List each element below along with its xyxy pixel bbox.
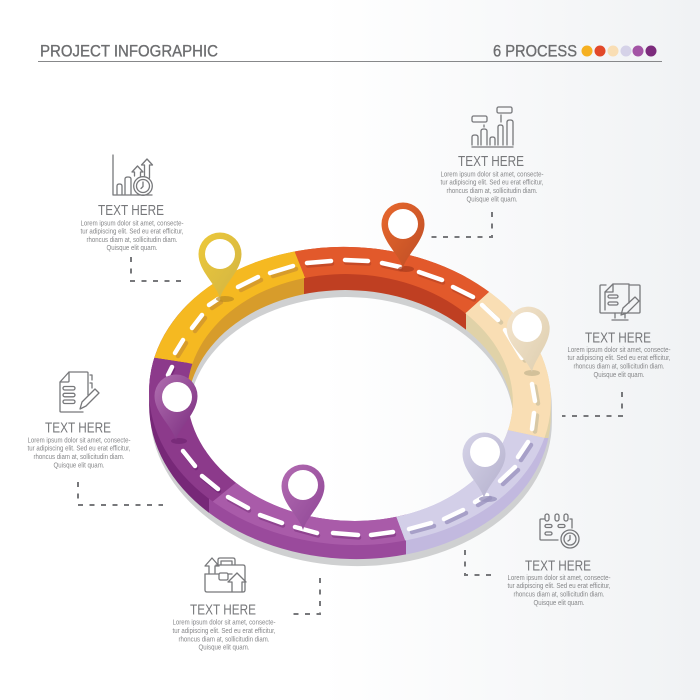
block: left text: rhoncus diam at, sollicitudin diam. [34,454,125,461]
block: right text: Lorem ipsum dolor sit amet, consecte- [568,347,671,354]
map pin: dark purple [154,374,198,444]
block: bottom text: tur adipiscing elit. Sed eu erat efficitur, [172,628,276,635]
block: lower right text: Lorem ipsum dolor sit amet, consecte- [508,575,611,582]
lane dashes: yellow [175,266,296,356]
block: left text [28,420,131,469]
block: lower right text: rhoncus diam at, sollicitudin diam. [514,592,605,598]
block: top right text: TEXT HERE [458,154,524,170]
block: top left text: rhoncus diam at, sollicitudin diam. [86,237,178,244]
block: left text: TEXT HERE [45,420,111,436]
block: lower right text [508,558,611,607]
icon: bar chart with labels [472,107,513,147]
block: left text: Lorem ipsum dolor sit amet, consecte- [28,437,131,444]
block: top right text: tur adipiscing elit. Sed eu erat efficitur, [440,180,544,187]
process colour dots [582,46,656,56]
ring side walls [149,247,551,559]
block: right text: TEXT HERE [585,330,651,346]
map pin: yellow [198,232,242,302]
lane dashes: lilac [409,442,531,532]
block: bottom text [172,602,276,652]
icon: briefcase with arrows [205,558,246,592]
block: top left text: Lorem ipsum dolor sit amet, consecte- [80,220,184,227]
road segment: light purple [213,482,405,545]
block: top right text [440,154,544,203]
lane dashes: light purple [228,497,394,538]
block: top left text: tur adipiscing elit. Sed eu erat efficitur, [80,228,184,236]
road segment: cream [465,292,551,438]
block: top left text: Quisque elit quam. [106,245,158,252]
map pin: light purple [282,464,324,530]
block: bottom text: Quisque elit quam. [198,644,250,652]
block: right text: Quisque elit quam. [594,372,645,379]
road segment: yellow [154,252,305,364]
connector: left [78,482,163,505]
header process label: 6 PROCESS [493,42,577,60]
connector: lower right [465,550,493,575]
connector: right [562,392,622,416]
connector: top right [429,212,492,237]
block: lower right text: Quisque elit quam. [534,600,585,607]
icon: document and pencil [60,372,99,412]
block: right text: rhoncus diam at, sollicitudin diam. [574,364,665,370]
lane dashes: cream [482,305,538,432]
lane dashes: dark purple [168,367,219,491]
block: bottom text: TEXT HERE [190,602,256,618]
block: lower right text: tur adipiscing elit. Sed eu erat efficitur, [508,583,611,590]
block: top left text [80,203,184,252]
block: right text [568,330,671,379]
header title: PROJECT INFOGRAPHIC [40,42,218,60]
connector: bottom [293,578,320,614]
icon: monitor with document and pencil [600,284,640,320]
road segment: dark purple [149,358,236,502]
icon: calendar with clock [540,514,579,548]
header rule [38,60,662,62]
block: right text: tur adipiscing elit. Sed eu erat efficitur, [568,355,671,362]
road segment: orange red [294,246,490,313]
block: top right text: rhoncus diam at, sollicitudin diam. [446,188,538,195]
map pin: cream [505,305,553,376]
block: bottom text: Lorem ipsum dolor sit amet, consecte- [172,620,276,626]
block: left text: tur adipiscing elit. Sed eu erat efficitur, [28,446,131,452]
ring ground shadow [150,254,552,566]
ring road [149,247,552,566]
road segment: lilac [396,430,544,540]
block: top left text: TEXT HERE [98,203,164,219]
block: top right text: Quisque elit quam. [466,196,518,203]
map pin: red [382,202,424,272]
block: top right text: Lorem ipsum dolor sit amet, consecte- [440,171,544,178]
block: bottom text: rhoncus diam at, sollicitudin diam. [178,636,270,643]
block: lower right text: TEXT HERE [525,558,591,574]
block: left text: Quisque elit quam. [54,462,105,469]
icon: chart with clock [113,155,152,195]
lane dashes: red [307,260,474,300]
connector: top left [131,257,182,281]
map pin: lilac [462,432,506,502]
